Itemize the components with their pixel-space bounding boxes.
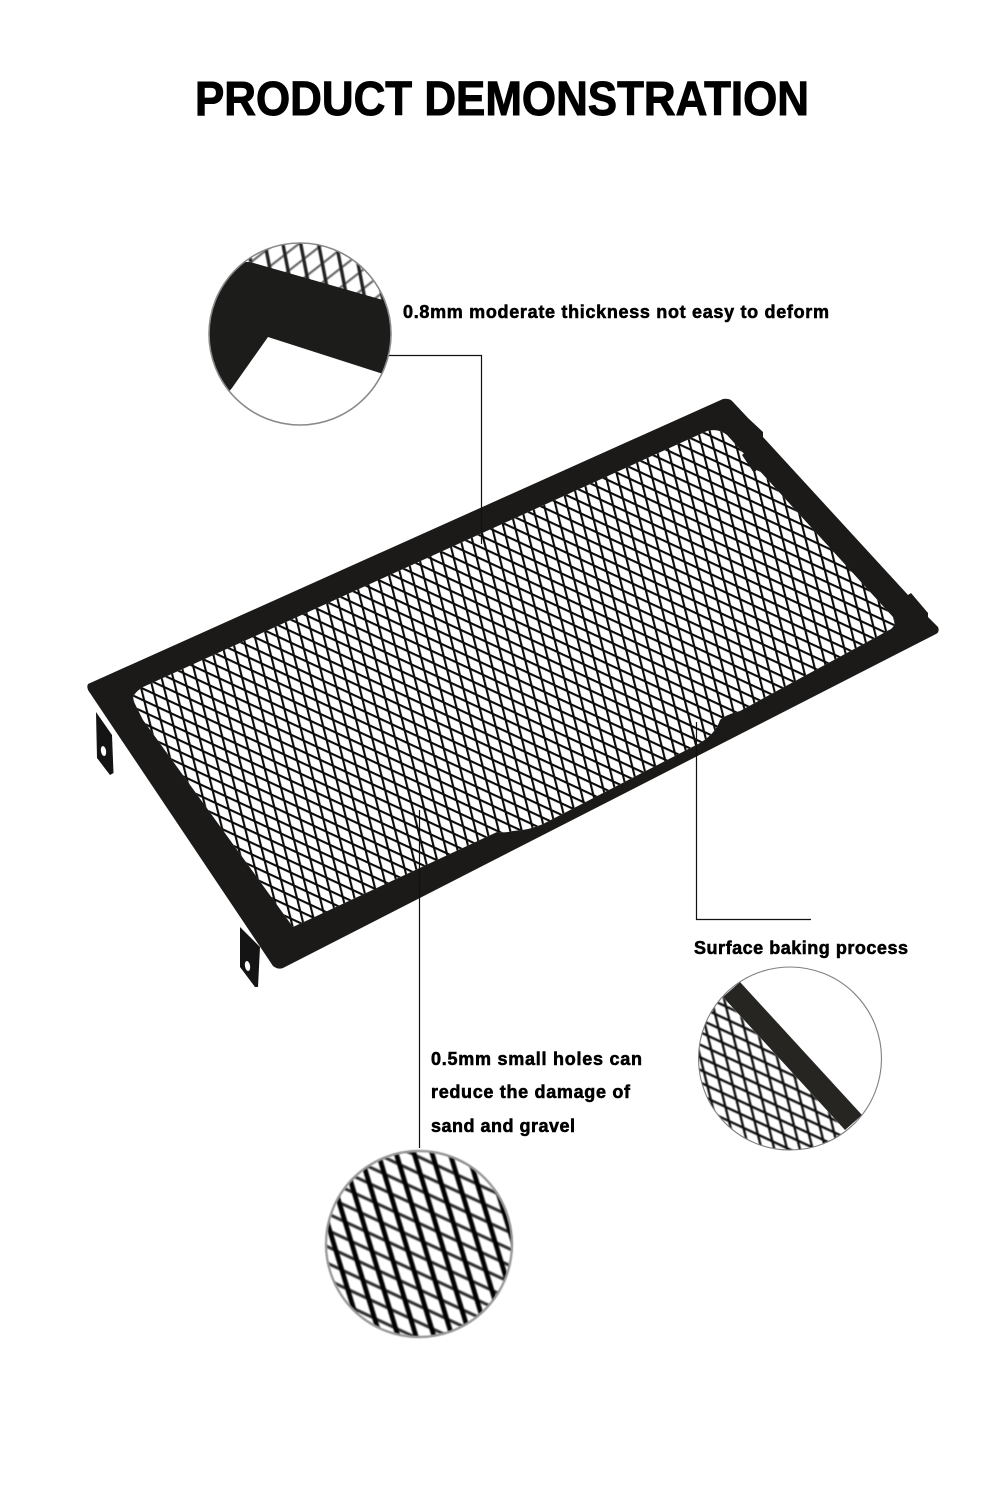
connector: surface callout line bbox=[696, 722, 811, 920]
bracket: bottom mounting tab bbox=[240, 927, 260, 987]
callout circle: surface baking detail bbox=[698, 966, 882, 1150]
text: small holes bbox=[431, 1049, 642, 1136]
callout circle: mesh close-up bbox=[320, 1145, 520, 1345]
title: PRODUCT DEMONSTRATION bbox=[195, 73, 809, 126]
text: small holes: sand and gravel bbox=[431, 1116, 575, 1136]
hook: small corner clip bbox=[742, 450, 759, 473]
connector: holes callout line bbox=[418, 810, 420, 1148]
text: surface baking: Surface baking process bbox=[694, 938, 908, 958]
bracket: left mounting tab bbox=[96, 712, 114, 775]
text: small holes: reduce the damage of bbox=[431, 1082, 631, 1102]
connector: thickness callout line bbox=[388, 356, 482, 544]
text: thickness: 0.8mm moderate thickness not easy to deform bbox=[403, 302, 829, 322]
mesh: diamond grille bbox=[120, 420, 910, 940]
frame: black metal frame bbox=[87, 399, 939, 969]
text: small holes: 0.5mm small holes can bbox=[431, 1049, 642, 1069]
callout circle: frame thickness detail bbox=[205, 240, 395, 430]
product: radiator guard bbox=[87, 399, 939, 987]
